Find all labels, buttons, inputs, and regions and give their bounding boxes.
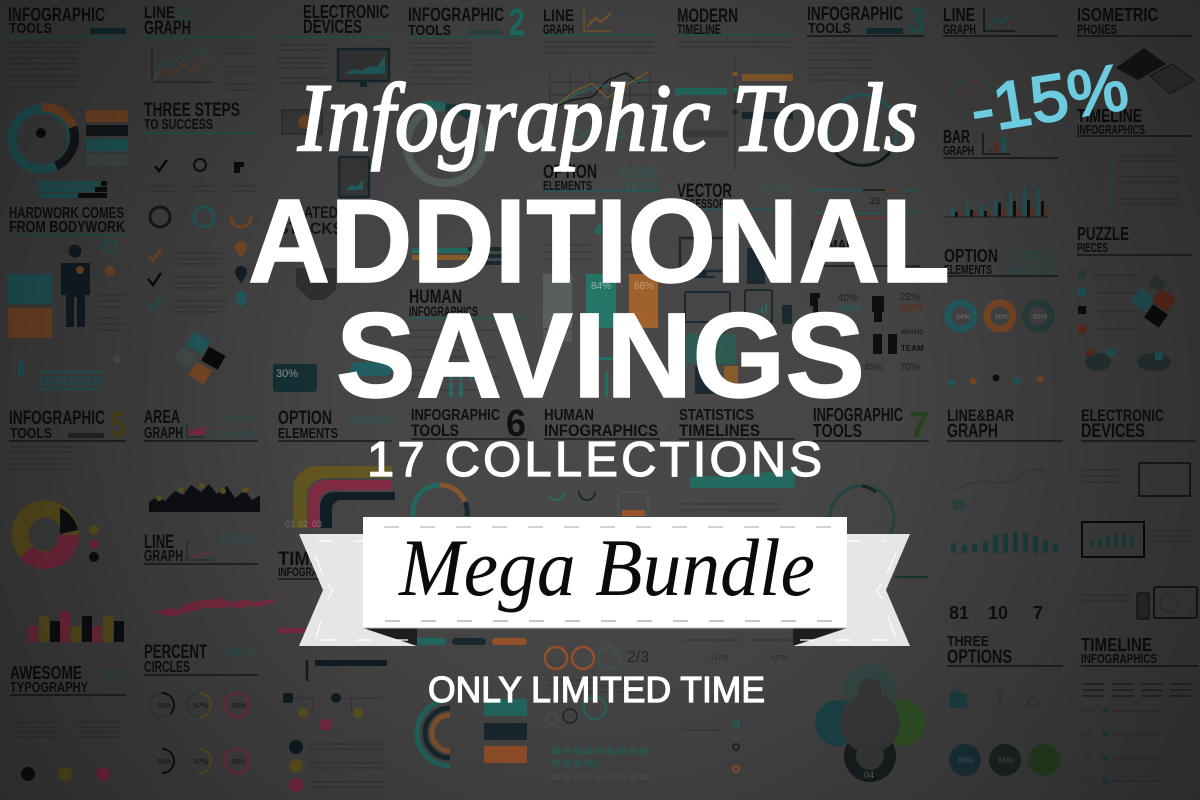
panel: line graph 2: LINE <box>543 6 574 25</box>
panel: human stats right: HUMAN <box>810 237 855 254</box>
panel: statistics timelines: TIMELINES <box>679 421 760 440</box>
panel: human stats right: BEHIND <box>901 330 924 336</box>
panel: infographic tools 7: INFOGRAPHIC <box>813 405 903 425</box>
heading: Savings: SAVINGS <box>336 287 865 423</box>
panel: electronic devices 1: ELECTRONIC <box>303 2 389 22</box>
panel: line graph 1: GRAPH <box>144 18 191 39</box>
panel: statistics timelines: STATISTICS <box>679 407 754 424</box>
panel: infographic tools 6: 6 <box>506 403 526 445</box>
panel: option elements circles: CIRCLE <box>1011 247 1058 266</box>
panel: awesome typography <box>10 663 126 781</box>
panel: option elements circles: OPTION <box>944 246 998 266</box>
panel: line graph 1: LINE <box>144 3 175 22</box>
panel: timeline infographics lower: TIME <box>278 549 322 570</box>
panel: isometric phones: PHONES <box>1077 21 1117 37</box>
panel: three options: 60% <box>958 756 974 765</box>
panel: human infographics lower: INFOGRAPHICS <box>544 421 658 440</box>
panel: bar graph: BAR <box>943 127 970 147</box>
icon: puzzle pieces <box>174 332 226 384</box>
panel: human stats right <box>810 237 924 373</box>
panel: human infographics lower: 14 <box>590 758 602 770</box>
panel: option elements middle: ELEMENTS <box>543 178 592 193</box>
panel: infographic tools 3: 23 <box>870 196 880 206</box>
panel: option elements middle: OPTION <box>543 162 597 183</box>
heading: Additional: ADDITIONAL <box>248 175 950 308</box>
panel: infographic tools 5 <box>9 404 126 642</box>
panel: line graph 5: LINE <box>144 532 174 553</box>
panel: human infographics: ALWAYS <box>470 289 525 308</box>
panel: electronic devices 1: STOCKS <box>278 219 343 238</box>
panel: puzzle pieces <box>1077 224 1192 371</box>
panel: infographic tools 3 <box>807 0 925 218</box>
panel: option elements stripes: ELEMENTS <box>278 425 338 442</box>
panel: line graph 2 <box>543 6 660 138</box>
panel: infographic tools 2 <box>407 2 525 265</box>
panel: human stats right: TEAM <box>901 344 924 353</box>
panel: infographic tools 6: TOOLS <box>411 421 459 440</box>
panel: option elements middle: 84% <box>591 281 611 292</box>
panel: infographic tools 3: 3 <box>909 0 925 41</box>
panel: timeline infographics right <box>1077 106 1192 208</box>
panel: three options: THREE <box>947 633 989 650</box>
panel: percent circles <box>144 642 258 773</box>
panel: vector accessories: ACCESSORIES <box>677 196 739 211</box>
panel: infographic tools 3: INFOGRAPHIC <box>807 4 903 25</box>
ribbon: Mega Bundle <box>299 517 910 646</box>
panel: electronic devices 1: RELATED <box>278 203 338 222</box>
panel: human stats right: 40% <box>838 293 858 304</box>
panel: option elements stripes: COMPARE <box>349 413 393 427</box>
panel: line graph 3 <box>943 5 1058 102</box>
panel: option elements stripes: 01 <box>285 519 295 529</box>
panel: electronic devices lower: ELECTRONIC <box>1081 406 1164 425</box>
panel: line graph 5: GRAPH <box>144 548 183 565</box>
panel: awesome typography: TEXT <box>102 667 126 682</box>
panel: human stats right: 45% <box>864 362 882 372</box>
panel: human infographics: INFOGRAPHICS <box>409 303 478 319</box>
panel: line and bar graph: 10 <box>988 603 1008 623</box>
panel: human infographics lower: HUMAN <box>544 407 594 424</box>
panel: bar graph <box>943 127 1058 217</box>
panel: isometric phones: ISOMETRIC <box>1077 5 1158 25</box>
panel: line and bar graph: 81 <box>949 603 969 623</box>
panel: three options: OPTIONS <box>947 647 1012 668</box>
panel: infographic tools 5: INFOGRAPHIC <box>9 408 105 429</box>
panel: infographic tools 5: TOOLS <box>10 425 52 442</box>
panel: area graph: GRAPH <box>144 425 183 442</box>
panel: statistics timelines: +37% <box>770 655 788 662</box>
panel: modern timeline: MODERN <box>677 6 738 27</box>
panel: percent circles: 35% <box>157 759 171 766</box>
panel: option elements stripes: 02 <box>298 519 308 529</box>
panel: percent circles: SIMPLE <box>225 647 258 659</box>
panel: human infographics: HUMAN <box>409 287 462 308</box>
panel: vector accessories <box>677 181 795 394</box>
ribbon right fold <box>793 628 847 646</box>
panel: modern timeline <box>675 6 795 170</box>
panel: area graph: DISPLAY <box>222 414 258 425</box>
panel: timeline infographics right: INFOGRAPHICS <box>1077 122 1145 137</box>
panel: area graph <box>144 407 260 512</box>
panel: hardwork comes from bodywork: FROM BODYWORK <box>9 219 125 236</box>
panel: percent circles: 85% <box>232 759 246 766</box>
panel: awesome typography: TYPOGRAPHY <box>10 679 88 696</box>
panel: option elements circles: 60% <box>995 314 1009 321</box>
panel: electronic devices 1 <box>273 2 392 392</box>
panel: percent circles: 57% <box>194 759 208 766</box>
panel: timeline infographics lower: INFOGRA <box>278 565 318 579</box>
panel: infographic tools 6: INFOGRAPHIC <box>411 407 500 424</box>
panel: hardwork comes from bodywork <box>8 205 126 389</box>
panel: percent circles: 83% <box>232 703 246 710</box>
panel: statistics timelines: +17% <box>710 655 728 662</box>
panel: hardwork comes from bodywork: HARDWORK COMES <box>9 205 124 222</box>
panel: electronic devices 1: 30% <box>276 368 298 380</box>
subheading: 17 Collections: 17 COLLECTIONS <box>367 433 822 487</box>
panel: option elements middle: ICONS <box>617 163 658 182</box>
panel: line graph 3: GRAPH <box>943 21 976 37</box>
ribbon left fold <box>363 628 417 646</box>
panel: line graph 1 <box>144 3 261 90</box>
panel: human infographics lower: 2/3 <box>627 649 649 666</box>
panel: three steps to success: THREE STEPS <box>144 100 240 121</box>
panel: puzzle pieces: PUZZLE <box>1077 224 1129 244</box>
discount badge: -15%: -15% <box>965 49 1133 147</box>
panel: infographic tools 1: INFOGRAPHIC <box>8 5 105 26</box>
panel: isometric phones <box>1077 5 1194 94</box>
panel: infographic tools 7 <box>813 404 929 782</box>
panel: electronic devices lower: DEVICES <box>1081 421 1145 442</box>
panel: human stats right: 70% <box>900 362 920 373</box>
panel: option elements stripes <box>278 408 395 529</box>
panel: infographic tools 1: TOOLS <box>9 20 52 37</box>
panel: option elements circles: 34% <box>956 314 970 321</box>
panel: timeline infographics bottom: INFOGRAPHICS <box>1081 651 1157 666</box>
panel: infographic tools 2: TOOLS <box>408 22 451 39</box>
ribbon right wing <box>793 534 910 646</box>
panel: infographic tools 2: INFOGRAPHIC <box>408 5 504 26</box>
panel: infographic tools 6 <box>411 403 527 766</box>
panel: line graph 5: AVERAGE <box>218 532 258 546</box>
panel: timeline infographics lower <box>278 549 400 792</box>
panel: percent circles: 35% <box>157 703 171 710</box>
footer: Only Limited Time: ONLY LIMITED TIME <box>428 669 765 710</box>
panel: line and bar graph: 7 <box>1033 603 1043 623</box>
panel: option elements middle <box>543 162 658 397</box>
panel: percent circles: 57% <box>194 703 208 710</box>
panel: percent circles: PERCENT <box>144 642 207 663</box>
panel: infographic tools 3: TOOLS <box>808 20 851 37</box>
panel: timeline infographics bottom <box>1081 635 1198 784</box>
panel: line and bar graph: GRAPH <box>947 421 998 442</box>
ribbon main band <box>363 517 847 628</box>
panel: infographic tools 2: 2 <box>509 2 525 44</box>
panel: option elements middle: 68% <box>634 281 654 292</box>
panel: line and bar graph: LINE&BAR <box>947 406 1014 425</box>
panel: line and bar graph <box>947 406 1063 623</box>
panel: line graph 5 <box>144 532 274 617</box>
panel: three steps to success: TO SUCCESS <box>144 116 213 133</box>
panel: option elements circles: 85% <box>1033 314 1047 321</box>
panel: infographic tools 7: 04 <box>864 770 874 780</box>
panel: line graph 2: GRAPH <box>543 21 574 37</box>
panel: timeline infographics bottom: TIMELINE <box>1081 635 1152 655</box>
panel: vector accessories: VECTOR <box>677 181 732 202</box>
panel: vector accessories: ELECTRONIC <box>760 185 792 192</box>
panel: area graph: AREA <box>144 407 180 427</box>
panel: modern timeline: TIMELINE <box>677 21 721 37</box>
panel: human infographics: USEFUL <box>490 305 524 319</box>
panel: electronic devices 1: DEVICES <box>303 17 362 38</box>
title script: Infographic Tools: Infographic Tools <box>297 64 918 171</box>
panel: infographic tools 5: 5 <box>111 404 126 445</box>
panel: option elements stripes: 03 <box>312 519 322 529</box>
panel: option elements circles <box>944 246 1058 386</box>
panel: option elements circles: &FACTLINE <box>1007 263 1058 277</box>
panel: option elements stripes: OPTION <box>278 408 332 429</box>
panel: line graph 3: LINE <box>943 5 975 25</box>
panel: timeline infographics right: TIMELINE <box>1077 106 1142 126</box>
panel: option elements circles: ELEMENTS <box>944 262 992 277</box>
panel: three options <box>947 633 1063 776</box>
panel: human infographics <box>409 287 525 397</box>
panel: option elements middle: &BARS <box>625 178 658 193</box>
panel: infographic tools 7: 7 <box>909 404 929 445</box>
panel: awesome typography: AWESOME <box>10 663 82 683</box>
panel: infographic tools 7: TOOLS <box>813 421 862 441</box>
panel: statistics timelines <box>679 407 795 772</box>
panel: percent circles: CIRCLES <box>144 659 190 676</box>
panel: three steps to success <box>144 100 259 312</box>
panel: bar graph: GRAPH <box>943 143 974 158</box>
panel: human infographics lower <box>544 407 660 777</box>
ribbon text: Mega Bundle <box>398 522 815 613</box>
panel: infographic tools 1 <box>8 5 128 198</box>
panel: human stats right: 22% <box>900 292 920 303</box>
panel: puzzle pieces: PIECES <box>1077 240 1108 255</box>
panel: area graph: THE NUMBERS <box>210 430 258 441</box>
panel: three options: 65% <box>998 756 1014 765</box>
panel: human stats right: QUIT <box>900 303 924 314</box>
panel: human stats right: LIKES <box>838 304 862 313</box>
panel: electronic devices lower <box>1081 406 1197 619</box>
ribbon left wing <box>299 534 417 646</box>
